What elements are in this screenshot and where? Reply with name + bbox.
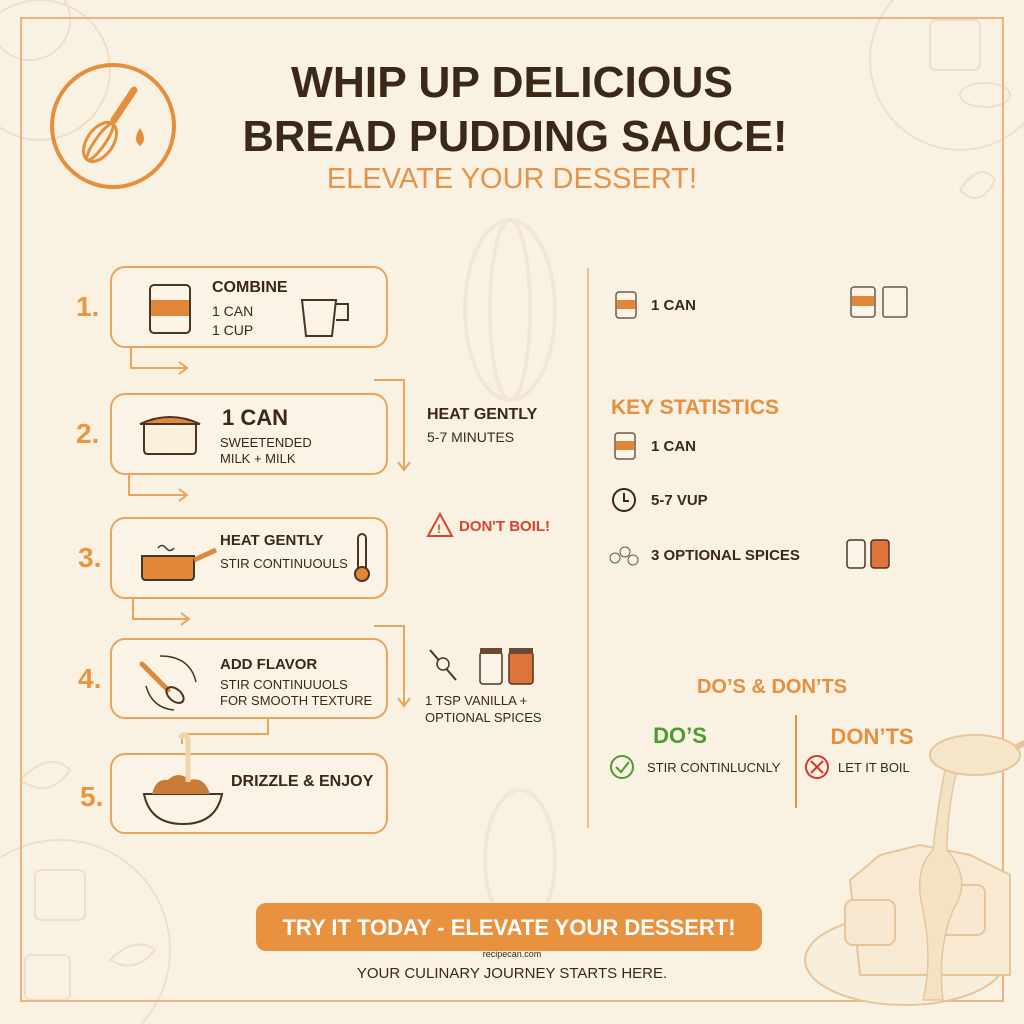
faint background whisk <box>465 220 555 930</box>
step 4 box <box>111 639 387 718</box>
step 2 box: SWEETENDED <box>220 435 312 450</box>
stat: time: 5-7 VUP <box>651 492 708 509</box>
warning: ! <box>437 522 441 536</box>
step 5 box: DRIZZLE & ENJOY <box>231 773 374 790</box>
step numbers: 1. <box>76 291 99 322</box>
heat gently note <box>427 406 538 445</box>
step 2 box: 1 CAN <box>222 405 288 430</box>
warning <box>428 514 550 536</box>
do's: STIR CONTINLUCNLY <box>647 760 781 775</box>
heat gently note: HEAT GENTLY <box>427 406 538 423</box>
column divider <box>587 268 589 828</box>
step numbers <box>76 291 103 812</box>
do's <box>611 723 781 778</box>
step 3 box: STIR CONTINUOULS <box>220 556 348 571</box>
stat: spices: 3 OPTIONAL SPICES <box>651 547 800 564</box>
step 1 box <box>111 267 387 347</box>
step 5 box <box>111 735 387 833</box>
step 1 box: 1 CUP <box>212 322 253 338</box>
title <box>242 58 788 161</box>
stat: can: 1 CAN <box>651 438 696 455</box>
do's & don'ts heading: DO’S & DON’TS <box>697 676 847 698</box>
stat: spices <box>610 540 889 568</box>
title: WHIP UP DELICIOUS <box>291 58 733 107</box>
flavor icons & note: 1 TSP VANILLA + <box>425 693 527 708</box>
step 3 box: HEAT GENTLY <box>220 532 323 549</box>
website: recipecan.com <box>483 949 541 959</box>
step numbers: 4. <box>78 663 101 694</box>
flavor icons & note: OPTIONAL SPICES <box>425 710 542 725</box>
step 3 box <box>111 518 387 598</box>
top ingredient row <box>616 287 907 318</box>
title: BREAD PUDDING SAUCE! <box>242 112 788 161</box>
top ingredient row: 1 CAN <box>651 297 696 314</box>
subtitle: ELEVATE YOUR DESSERT! <box>327 163 697 195</box>
step 4 box: ADD FLAVOR <box>220 656 317 673</box>
connector to step 5 <box>182 718 268 744</box>
heat gently note: 5-7 MINUTES <box>427 429 514 445</box>
step 4 box: STIR CONTINUUOLS <box>220 677 348 692</box>
do's: DO’S <box>653 723 707 748</box>
stat: can <box>615 433 696 459</box>
warning: DON'T BOIL! <box>459 518 550 535</box>
illustration: bread pudding with sauce <box>805 735 1024 1005</box>
arrow 1 <box>131 348 187 374</box>
CTA button: TRY IT TODAY - ELEVATE YOUR DESSERT! <box>282 915 736 940</box>
step 2 box <box>111 394 387 474</box>
arrow 3 <box>129 475 187 501</box>
step 1 box: COMBINE <box>212 279 288 296</box>
don'ts: LET IT BOIL <box>838 760 910 775</box>
arrow 4 <box>133 599 189 625</box>
step numbers: 5. <box>80 781 103 812</box>
don'ts <box>806 724 914 778</box>
don'ts: DON’TS <box>830 724 914 749</box>
step 2 box: MILK + MILK <box>220 451 296 466</box>
arrow 2 side <box>374 380 410 470</box>
CTA button <box>256 903 762 951</box>
flavor icons & note <box>425 648 542 725</box>
key statistics heading: KEY STATISTICS <box>611 396 779 419</box>
step numbers: 2. <box>76 418 99 449</box>
step numbers: 3. <box>78 542 101 573</box>
tagline: YOUR CULINARY JOURNEY STARTS HERE. <box>357 965 667 982</box>
step 4 box: FOR SMOOTH TEXTURE <box>220 693 372 708</box>
stat: time <box>613 489 708 511</box>
icon: whisk circle <box>52 65 174 187</box>
step 1 box: 1 CAN <box>212 303 253 319</box>
